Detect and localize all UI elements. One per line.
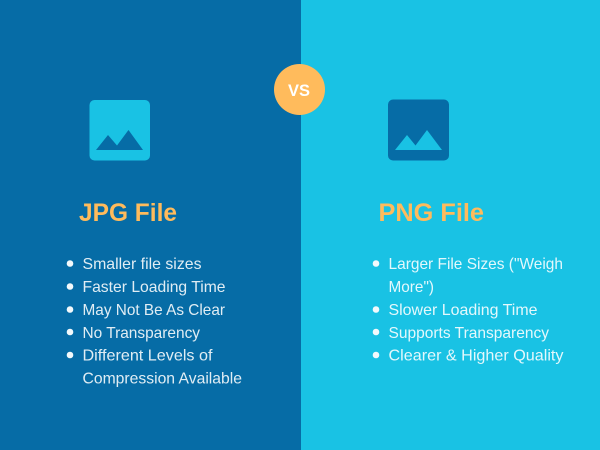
list: JPG features [67,256,242,388]
list: PNG features: Supports Transparency [388,325,549,342]
list: JPG features: Compression Available [82,370,242,388]
list: JPG features: Faster Loading Time [82,279,226,296]
list: JPG features: May Not Be As Clear [82,302,226,319]
list: PNG features: Larger File Sizes ("Weigh [388,256,563,273]
badge: VS: VS [288,81,310,100]
list: PNG features: Clearer & Higher Quality [388,348,564,364]
list: PNG features: More") [388,279,434,296]
heading: PNG File: PNG File [378,199,484,227]
heading: JPG File: JPG File [79,199,177,227]
list: PNG features: Slower Loading Time [388,302,538,319]
list: JPG features: No Transparency [82,325,200,342]
icon: JPG image [90,100,150,160]
panel: JPG [0,0,301,450]
list: JPG features: Different Levels of [82,348,213,364]
icon: PNG image [388,100,449,160]
list: PNG features [373,256,564,364]
panel: PNG [301,0,600,450]
badge: VS [274,64,325,115]
list: JPG features: Smaller file sizes [82,256,202,273]
